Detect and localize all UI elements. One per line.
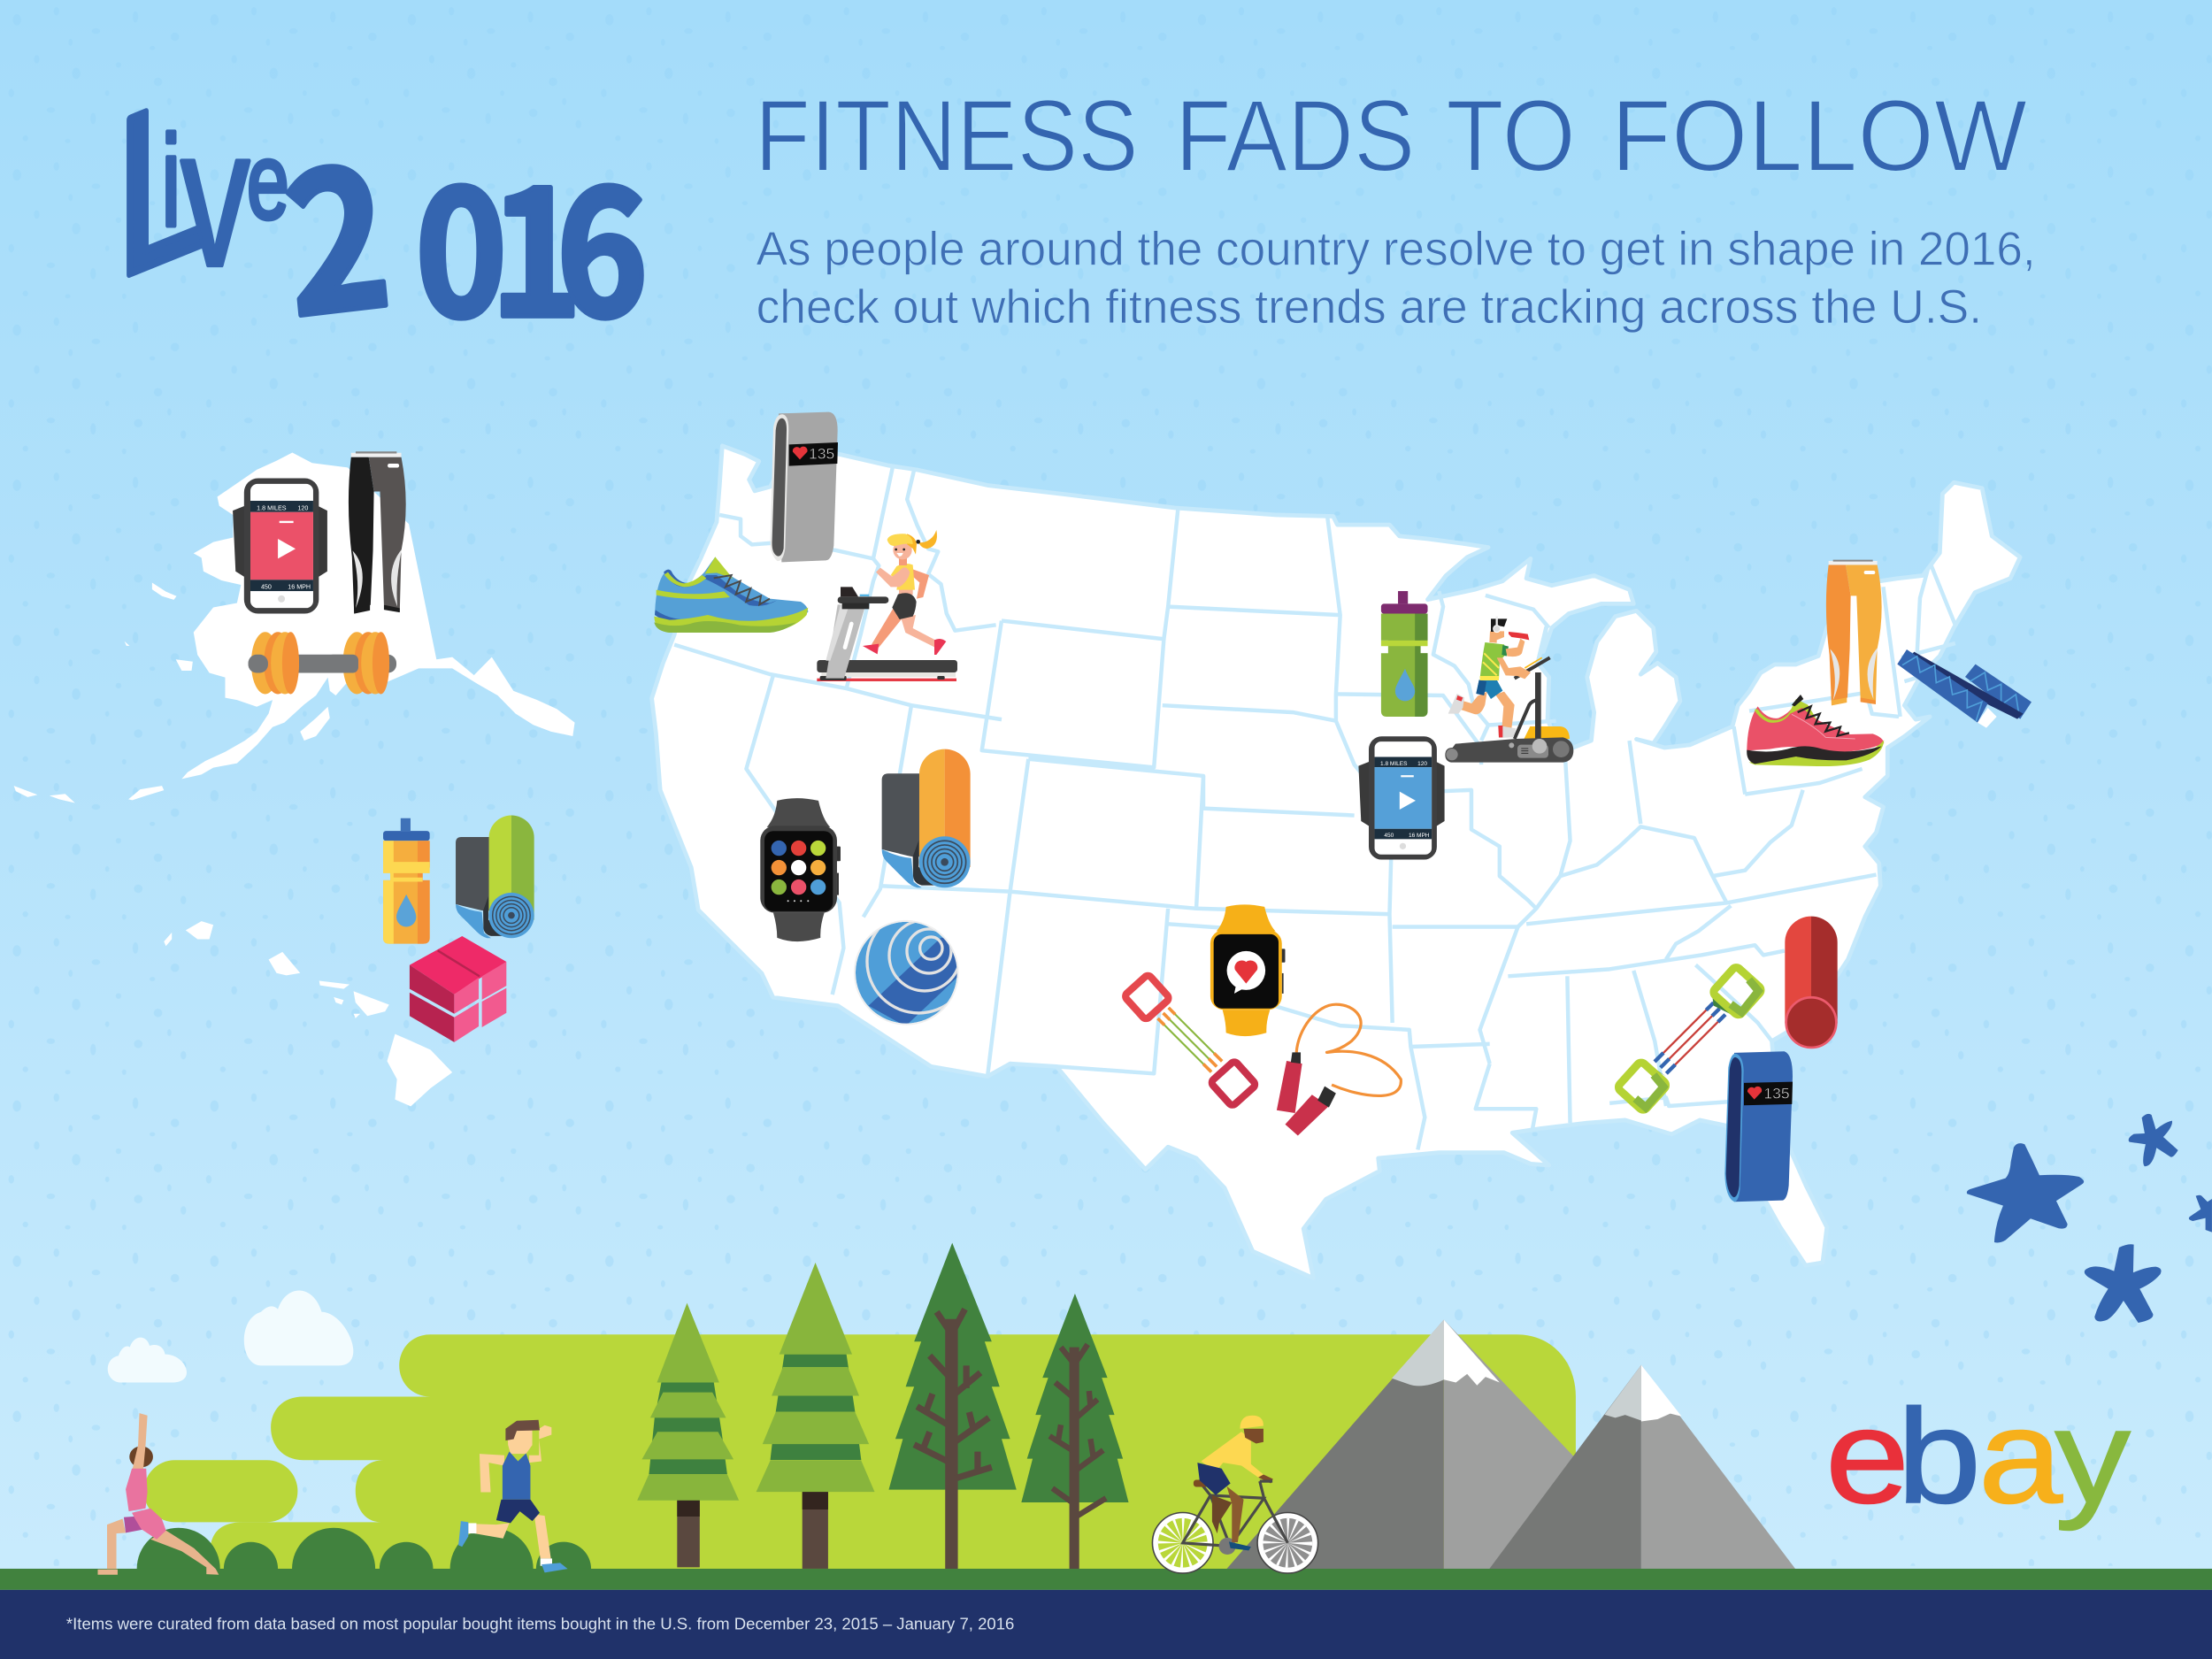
woman runner	[863, 530, 946, 655]
icon: armband phone, blue screen: 1.8 MILES	[1380, 761, 1408, 767]
icon: yellow smart watch	[1210, 904, 1285, 1036]
person: cyclist on bicycle	[1152, 1416, 1318, 1573]
icon: armband phone, red screen: 450	[261, 584, 272, 591]
icon: green resistance expander	[1617, 965, 1763, 1111]
icon: green water bottle	[1381, 591, 1428, 717]
logo: ebay: e	[1825, 1382, 1909, 1532]
icon: blue fitness band: 135	[1763, 1086, 1790, 1102]
icon: orange water bottle	[383, 818, 430, 944]
icon: gray fitness band	[771, 412, 838, 562]
title: FOLLOW	[1611, 80, 2027, 193]
icon: green yoga mat	[456, 816, 534, 938]
illustration: green hills	[144, 1334, 1576, 1569]
ground strip	[0, 1569, 2212, 1590]
footnote: *Items were curated from data based on most popular bought items bought in the U.S. from December 23, 2015 – January 7, 2016	[66, 1615, 1014, 1633]
icon: man on treadmill	[1445, 617, 1573, 763]
illustration: clouds	[108, 1290, 353, 1382]
decoration: edge star	[2189, 1195, 2212, 1233]
icon: pink exercise blocks	[410, 936, 506, 1042]
icon: orange yoga mat	[882, 749, 971, 887]
title	[755, 80, 2027, 193]
icon: armband phone, red screen: 16 MPH	[288, 584, 311, 591]
map: contiguous United States	[652, 446, 2020, 1279]
title: FITNESS	[755, 80, 1139, 193]
map: Alaska	[14, 453, 575, 803]
icon: armband phone, blue screen: 450	[1384, 833, 1394, 839]
map: Hawaii	[164, 921, 452, 1106]
icon: blue fitness band	[1724, 1051, 1793, 1202]
subtitle: As people around the country resolve to get in shape in 2016,	[757, 223, 2036, 276]
icon: blue headband	[1897, 649, 2032, 728]
icon: black leggings	[349, 451, 406, 614]
icon: orange dumbbell	[249, 632, 396, 694]
logo: Live 2016: L	[116, 39, 211, 327]
bicycle wheels	[1152, 1513, 1318, 1573]
illustration: bushes	[137, 1528, 591, 1569]
logo: Live 2016: v	[180, 87, 250, 307]
icon: armband phone, blue screen: 16 MPH	[1409, 833, 1430, 839]
logo: Live 2016	[116, 39, 649, 372]
logo: ebay: a	[1978, 1382, 2062, 1532]
icon: armband phone, red screen	[233, 478, 327, 614]
logo: Live 2016: e	[247, 121, 289, 242]
icon: runner on treadmill	[817, 530, 957, 681]
icon: blue exercise ball	[854, 920, 959, 1025]
man runner	[1448, 617, 1531, 738]
logo: ebay: y	[2055, 1382, 2131, 1532]
illustration: small mountain	[1489, 1365, 1795, 1569]
icon: gray fitness band: 135	[809, 445, 834, 462]
illustration: pine tree 1	[637, 1303, 739, 1567]
logo: Live 2016: 2	[273, 84, 400, 372]
logo: Live 2016: 0	[415, 115, 507, 366]
icon: blue running shoe	[654, 557, 808, 633]
decoration: medium star	[2085, 1244, 2162, 1323]
icon: armband phone, blue screen	[1358, 736, 1445, 860]
icon: dark smart watch	[760, 798, 841, 941]
illustration: pine tree 2	[757, 1263, 875, 1569]
illustration: dark tree 3	[888, 1243, 1017, 1569]
footer band	[0, 1590, 2212, 1659]
icon: jump rope	[1277, 1004, 1401, 1135]
person: yoga pose	[97, 1413, 219, 1575]
subtitle: check out which fitness trends are tracking across the U.S.	[757, 280, 1982, 334]
logo: ebay	[1825, 1382, 2131, 1532]
logo: ebay: b	[1897, 1382, 1981, 1532]
illustration: large mountain	[1226, 1320, 1616, 1569]
subtitle	[757, 223, 2036, 334]
logo: Live 2016: i	[161, 108, 181, 253]
icon: red resistance expander	[1124, 974, 1256, 1107]
illustration: dark tree 4	[1021, 1294, 1129, 1569]
icon: pink running shoe	[1747, 695, 1884, 766]
person: runner	[458, 1420, 568, 1572]
title: TO	[1446, 80, 1576, 193]
logo: Live 2016: 6	[557, 115, 649, 366]
title: FADS	[1175, 80, 1415, 193]
icon: armband phone, blue screen: 120	[1417, 761, 1427, 767]
mainland outline	[652, 446, 2020, 1279]
decoration: top star	[2129, 1114, 2178, 1166]
icon: orange leggings	[1826, 560, 1882, 705]
icon: armband phone, red screen: 1.8 MILES	[257, 504, 287, 511]
icon: red foam roller	[1785, 917, 1838, 1048]
decoration: large star	[1967, 1143, 2084, 1242]
logo: Live 2016: 1	[490, 115, 582, 366]
icon: armband phone, red screen: 120	[297, 504, 308, 511]
